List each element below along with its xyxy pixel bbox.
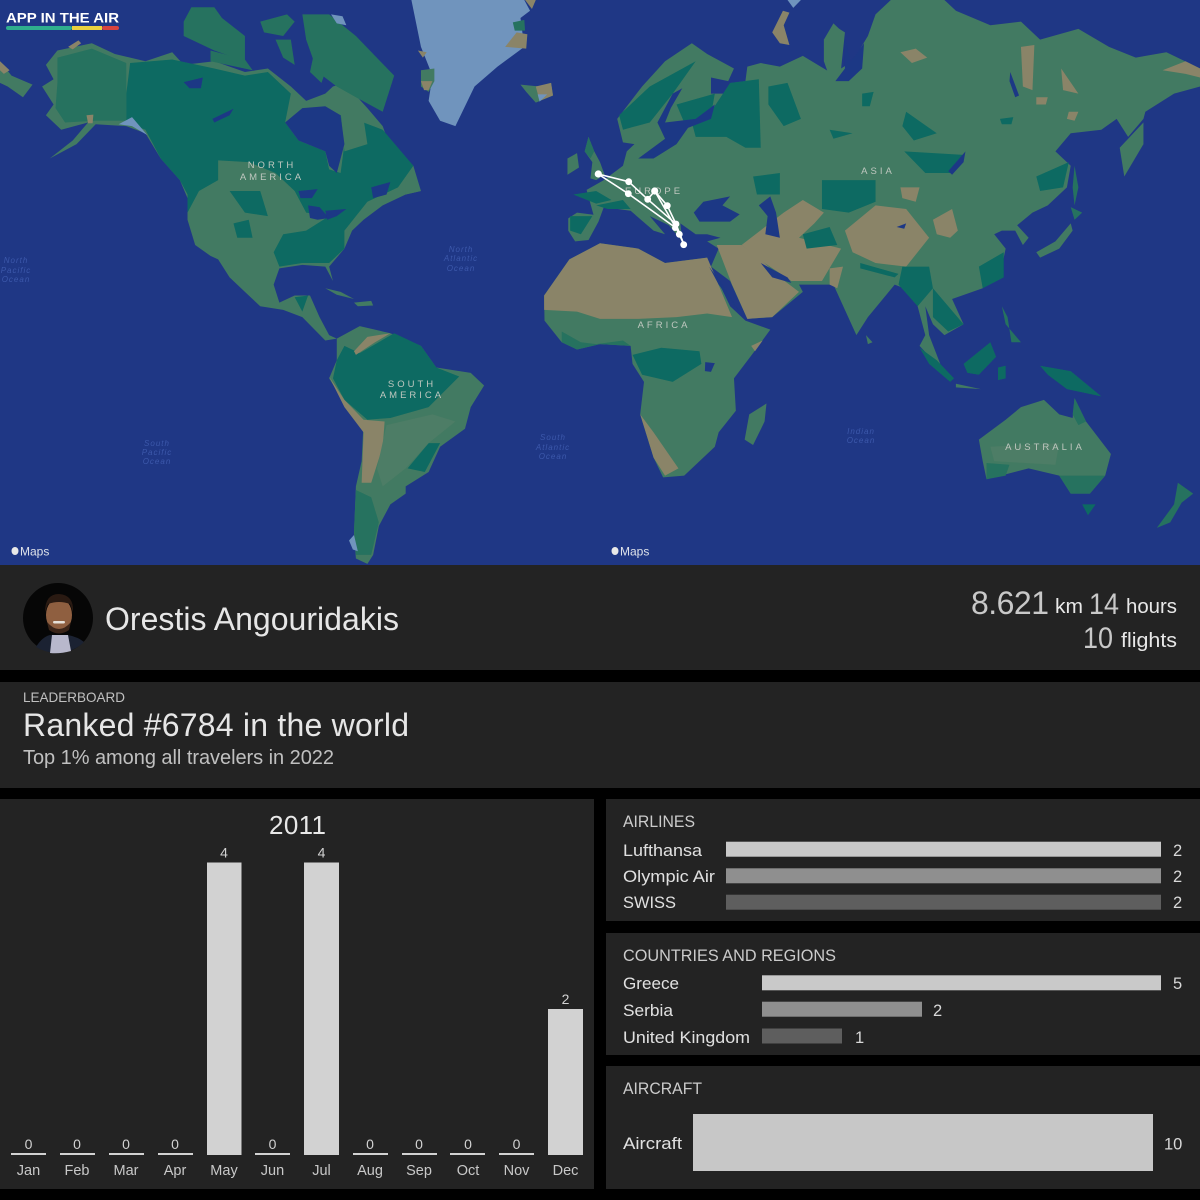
bar values: 4 bbox=[318, 844, 326, 860]
travel stats: km bbox=[1055, 596, 1083, 618]
row: Olympic Air: Olympic Air bbox=[623, 868, 716, 886]
map: ocean labels: Ocean bbox=[847, 436, 875, 445]
travel stats bbox=[971, 585, 1177, 655]
month labels: Oct bbox=[457, 1163, 479, 1179]
bar values: 0 bbox=[513, 1136, 521, 1152]
row: Aircraft: 10 bbox=[1164, 1136, 1182, 1154]
month labels: Aug bbox=[357, 1163, 383, 1179]
row: SWISS bbox=[623, 894, 1182, 912]
row: Olympic Air: 2 bbox=[1173, 868, 1182, 886]
maps attribution left: Maps bbox=[20, 544, 49, 558]
month labels: Jun bbox=[261, 1163, 284, 1179]
map: ocean labels: Atlantic bbox=[535, 443, 570, 452]
airlines heading: AIRLINES bbox=[623, 813, 695, 831]
map: ocean labels: Atlantic bbox=[443, 254, 478, 263]
map: continent labels: EUROPE bbox=[625, 186, 683, 197]
bars bbox=[11, 862, 583, 1155]
row: Serbia: 2 bbox=[933, 1002, 942, 1020]
bar values: 4 bbox=[220, 844, 228, 860]
month labels: Mar bbox=[114, 1163, 139, 1179]
travel stats: hours bbox=[1126, 596, 1177, 618]
month labels: Jul bbox=[312, 1163, 331, 1179]
map: ocean labels: Ocean bbox=[447, 264, 475, 273]
map: continent labels: NORTH bbox=[248, 160, 296, 171]
bar values: 0 bbox=[366, 1136, 374, 1152]
bar values: 0 bbox=[269, 1136, 277, 1152]
South America bbox=[329, 326, 484, 564]
Australia bbox=[979, 398, 1111, 494]
map: ocean labels: North bbox=[449, 245, 473, 254]
map: continent labels: AMERICA bbox=[240, 172, 304, 183]
map: continent labels: SOUTH bbox=[388, 379, 436, 390]
bar values: 0 bbox=[415, 1136, 423, 1152]
panel: monthly bar chart 2011 bbox=[0, 799, 594, 1189]
travel stats: 8.621 bbox=[971, 585, 1049, 621]
rank subtext: Top 1% among all travelers in 2022 bbox=[23, 747, 334, 769]
map: Americas and Greenland bbox=[0, 0, 553, 564]
row: Greece: Greece bbox=[623, 975, 679, 993]
panel: profile bbox=[0, 565, 1200, 670]
month labels: Feb bbox=[64, 1163, 90, 1179]
map: ocean labels: South bbox=[540, 433, 566, 442]
panel: countries and regions bbox=[606, 933, 1200, 1055]
countries heading: COUNTRIES AND REGIONS bbox=[623, 947, 836, 965]
leaderboard label: LEADERBOARD bbox=[23, 689, 125, 705]
islands bbox=[772, 11, 789, 45]
map: continent labels: AMERICA bbox=[380, 390, 444, 401]
bar values: 2 bbox=[562, 991, 570, 1007]
month labels bbox=[17, 1163, 578, 1179]
panel: airlines bbox=[606, 799, 1200, 921]
bar values: 0 bbox=[25, 1136, 33, 1152]
map: continent labels: ASIA bbox=[861, 166, 895, 177]
map: continent labels bbox=[240, 160, 1085, 453]
row: Lufthansa: Lufthansa bbox=[623, 842, 703, 860]
panel: world map bbox=[0, 0, 1200, 565]
map: ocean labels: Pacific bbox=[1, 266, 31, 275]
row: Aircraft: Aircraft bbox=[623, 1135, 682, 1153]
row: United Kingdom bbox=[623, 1028, 864, 1047]
Eurasia bbox=[568, 0, 1200, 375]
bar values: 0 bbox=[73, 1136, 81, 1152]
map: ocean labels: Ocean bbox=[539, 452, 567, 461]
map: ocean labels: Pacific bbox=[142, 448, 172, 457]
flight routes bbox=[595, 170, 687, 248]
month labels: Nov bbox=[504, 1163, 530, 1179]
bar values: 0 bbox=[171, 1136, 179, 1152]
rank headline: Ranked #6784 in the world bbox=[23, 707, 409, 743]
map: ocean labels: North bbox=[4, 256, 28, 265]
map: ocean labels bbox=[1, 245, 875, 466]
row: United Kingdom: 1 bbox=[855, 1029, 864, 1047]
panel: leaderboard bbox=[0, 682, 1200, 788]
row: Olympic Air bbox=[623, 868, 1182, 886]
row: Serbia: Serbia bbox=[623, 1002, 674, 1020]
map: continent labels: AFRICA bbox=[638, 320, 690, 331]
month labels: Jan bbox=[17, 1163, 40, 1179]
chart title: 2011 bbox=[269, 810, 326, 840]
travel stats: 10 bbox=[1083, 622, 1113, 655]
travel stats: 14 bbox=[1089, 588, 1119, 621]
month labels: May bbox=[210, 1163, 238, 1179]
map: continent labels: AUSTRALIA bbox=[1005, 442, 1085, 453]
maps attribution right: Maps bbox=[620, 544, 649, 558]
map: ocean labels: Ocean bbox=[2, 275, 30, 284]
travel stats: flights bbox=[1121, 630, 1177, 652]
map: ocean labels: South bbox=[144, 439, 170, 448]
panel: aircraft bbox=[606, 1066, 1200, 1189]
logo: App in the Air: APP IN THE AIR bbox=[6, 10, 119, 26]
month labels: Dec bbox=[553, 1163, 578, 1179]
row: SWISS: SWISS bbox=[623, 894, 676, 912]
aircraft heading: AIRCRAFT bbox=[623, 1080, 702, 1098]
map: ocean labels: Indian bbox=[847, 427, 875, 436]
profile name: Orestis Angouridakis bbox=[105, 601, 399, 637]
bar values: 0 bbox=[122, 1136, 130, 1152]
bar values: 0 bbox=[464, 1136, 472, 1152]
map: Europe, Africa, Asia, Oceania bbox=[544, 0, 1200, 528]
icon: avatar portrait bbox=[23, 583, 93, 653]
map: ocean labels: Ocean bbox=[143, 457, 171, 466]
row: SWISS: 2 bbox=[1173, 894, 1182, 912]
Africa bbox=[544, 243, 770, 477]
row: United Kingdom: United Kingdom bbox=[623, 1029, 750, 1047]
row: Lufthansa bbox=[623, 842, 1182, 860]
month labels: Apr bbox=[164, 1163, 186, 1179]
row: Aircraft bbox=[623, 1114, 1182, 1171]
row: Greece: 5 bbox=[1173, 975, 1182, 993]
row: Greece bbox=[623, 975, 1182, 993]
seas bbox=[638, 88, 715, 159]
bar values bbox=[25, 844, 570, 1152]
row: Serbia bbox=[623, 1002, 942, 1020]
row: Lufthansa: 2 bbox=[1173, 842, 1182, 860]
month labels: Sep bbox=[406, 1163, 432, 1179]
